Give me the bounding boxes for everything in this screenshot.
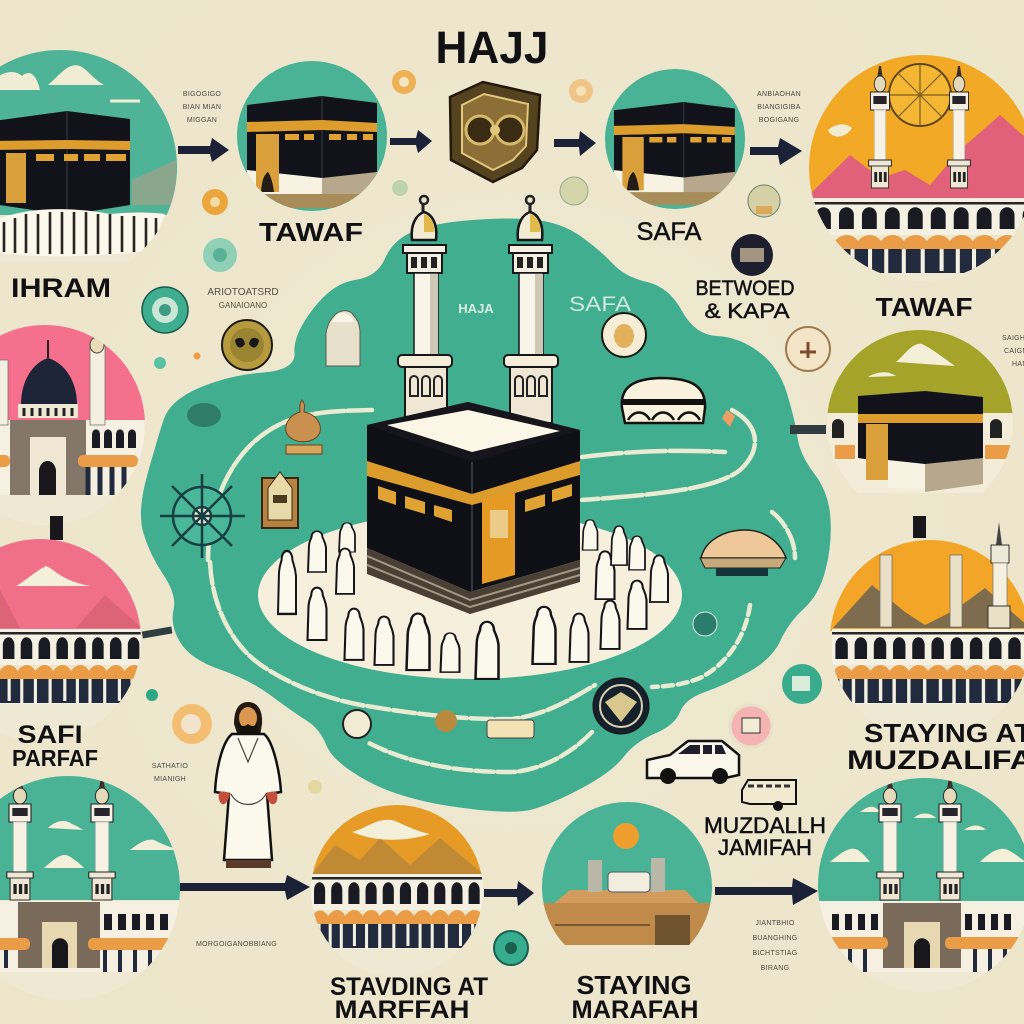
label: Muzdalah Jamifah — [704, 813, 826, 860]
label: Muzdalah Jamifah: JAMIFAH — [718, 835, 812, 860]
icon: small disc — [560, 177, 588, 205]
connector: right horizontal — [790, 425, 826, 434]
icon: small green dot left — [146, 689, 158, 701]
icon: orange diamond — [722, 410, 735, 427]
connector: left vertical — [50, 516, 63, 540]
label: Between Safa and Kapa: BETWOED — [696, 277, 794, 300]
figure: pilgrim man — [215, 702, 281, 868]
arrow: bottom 3 — [715, 878, 818, 905]
panel: step 11 right Kaaba — [825, 325, 1020, 493]
caption: upper left of cloud: ARIOTOATSRD — [207, 287, 279, 298]
caption: Sathatio: MIANIGH — [154, 776, 186, 783]
icon: small dots left — [154, 352, 200, 369]
icon: teal badge right — [782, 664, 822, 704]
caption: lower right: BUANGHING — [752, 935, 798, 942]
label: Safi Parfaf — [12, 721, 98, 771]
label: Stavding at Marfah: MARFFAH — [334, 996, 470, 1024]
label: Staying at Muzdalifa: MUZDALIFA — [847, 745, 1024, 775]
icon: car — [647, 741, 739, 784]
icon: small teal flower — [392, 180, 408, 196]
panel: step 8 bottom — [311, 805, 482, 950]
icon: bus on cloud — [622, 378, 705, 423]
label: Safa: SAFA — [636, 218, 702, 246]
caption: top right: ANBIAOHAN — [757, 91, 801, 98]
label: Staying Marafah: STAYING — [576, 970, 692, 1000]
panel: white courtyard — [258, 511, 682, 679]
icon: green ring badge — [142, 287, 188, 333]
arrow: 3 to 4 top — [554, 131, 596, 156]
label: Staying Marafah: MARAFAH — [572, 996, 698, 1024]
icon: lantern — [286, 400, 322, 454]
icon: small box — [487, 720, 534, 738]
Kaaba body — [367, 402, 580, 592]
illustration: central Kaaba with minarets — [367, 196, 580, 614]
icon: right disc — [748, 185, 780, 217]
panel: step 7 bottom left — [0, 775, 190, 1002]
caption: Ihram: BIGOGIGO — [183, 91, 221, 98]
label: Staying at Muzdalifa — [847, 718, 1024, 775]
icon: small cloud bush — [187, 403, 221, 427]
icon: central ornate tile — [450, 82, 540, 182]
icon: pale badge — [786, 327, 830, 371]
arrow: bottom 1 — [180, 875, 310, 900]
label: Staying Marafah — [572, 970, 698, 1024]
caption: bottom left: MORGOIGANOBBIANG — [196, 941, 277, 948]
panel: step 12 right arcade — [830, 540, 1024, 704]
caption: lower right: BIRANG — [761, 965, 789, 972]
group: pilgrims — [278, 520, 668, 679]
label: Safi Parfaf: SAFI — [18, 721, 82, 749]
icon: small ring — [343, 710, 371, 738]
arrow: 4 — [750, 138, 802, 165]
label: Between Safa and Kapa — [696, 277, 794, 323]
icon: small sparkle — [308, 780, 322, 794]
icon: dark medal — [593, 678, 649, 734]
icon: dome vehicle on cloud — [700, 530, 786, 572]
connector: right vertical — [913, 516, 926, 538]
label: Tawaf: TAWAF — [259, 217, 363, 247]
label: Ihram: IHRAM — [11, 273, 111, 303]
icon: gold badge on cloud — [602, 313, 646, 357]
arrow: 2 to 3 — [390, 130, 432, 153]
label: Safa on cloud: SAFA — [569, 293, 631, 316]
caption: Sathatio: SATHATIO — [152, 763, 188, 770]
icon: teal badge — [203, 238, 237, 272]
caption: upper left of cloud: GANAIOANO — [219, 301, 267, 310]
panel: pale dashed walkway — [208, 410, 795, 772]
icon: dark badge — [731, 234, 773, 276]
icon: orange flower right — [569, 79, 593, 103]
icon: teal disc bottom — [494, 931, 528, 965]
connector: left horizontal — [142, 626, 172, 639]
icon: skull badge — [222, 320, 272, 370]
panel: central green cloud — [141, 218, 831, 812]
panel: step 9 bottom — [542, 802, 712, 945]
labels: cloud label Haja: HAJA — [458, 301, 494, 316]
label: Tawaf right: TAWAF — [876, 292, 972, 322]
icon: tall right minaret — [988, 522, 1010, 628]
icon: van — [742, 780, 796, 811]
icon: left minaret — [398, 196, 452, 417]
icon: dharma wheel — [160, 474, 245, 558]
caption: top right: BIANGIGIBA — [757, 104, 801, 111]
caption: Ihram: BIAN MIAN — [183, 104, 221, 111]
arrow: bottom 2 — [484, 881, 534, 906]
label: Staying at Muzdalifa: STAYING AT — [864, 718, 1024, 748]
caption: lower right: JIANTBHIO — [755, 920, 795, 927]
label: Safi Parfaf: PARFAF — [12, 745, 98, 771]
label: Between Safa and Kapa: & KAPA — [704, 300, 790, 323]
panel: step 5 mosque — [0, 325, 145, 495]
icon: small coin — [693, 612, 717, 636]
panel: step 3 Safa — [605, 69, 745, 209]
label: Stavding at Marfah: STAVDING AT — [330, 973, 488, 1001]
panel: step 4 Tawaf top right — [809, 55, 1024, 276]
icon: pink badge — [730, 705, 772, 747]
panel: step 2 Tawaf — [237, 61, 387, 211]
caption: lower right: BICHTSTIAG — [752, 950, 798, 957]
icon: small gold flower — [435, 710, 457, 732]
icon: framed door — [262, 472, 298, 528]
caption: Ihram: MIGGAN — [187, 117, 217, 124]
title: HAJJ — [436, 22, 548, 73]
panel: step 6 arcade left — [0, 539, 141, 704]
arrow: 1 to 2 — [178, 138, 229, 162]
caption: top right: BOGIGANG — [759, 117, 799, 124]
icon: right minaret — [504, 196, 558, 423]
icon: orange flower — [392, 70, 416, 94]
icon: orange medal — [172, 704, 212, 744]
icon: orange badge — [202, 189, 228, 215]
panel: step 1 Ihram — [0, 40, 180, 262]
label: Stavding at Marfah — [330, 973, 488, 1024]
panel: step 10 bottom right — [815, 775, 1024, 1002]
icon: shrine — [326, 311, 360, 366]
label: Muzdalah Jamifah: MUZDALLH — [704, 813, 826, 838]
